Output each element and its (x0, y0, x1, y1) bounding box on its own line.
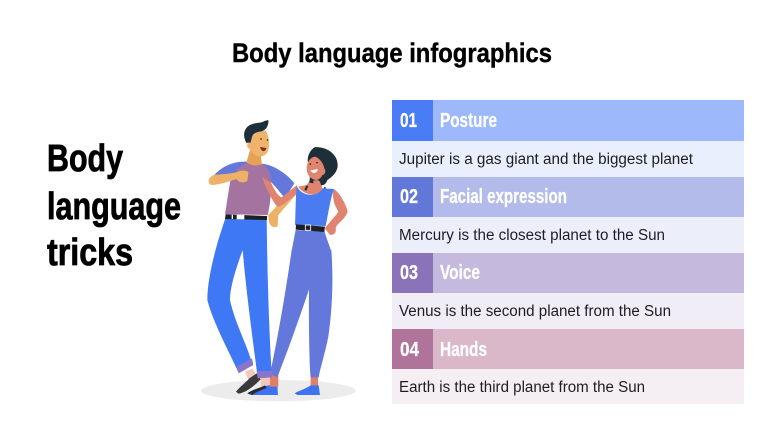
header band (392, 329, 744, 369)
woman: eyes (309, 162, 318, 165)
man: left sleeve (214, 162, 250, 176)
woman: right arm (325, 189, 348, 235)
man: front foot and shoe (247, 375, 278, 395)
row 2: facial expression: Facial expression (440, 186, 567, 208)
woman: arm on shoulder (262, 177, 297, 207)
woman: upper body (262, 147, 348, 251)
row 1: posture (392, 100, 744, 177)
number box (392, 329, 433, 369)
number box (392, 253, 433, 293)
woman: feet and shoes (270, 373, 320, 395)
description (392, 217, 744, 253)
row 1: posture: Jupiter is a gas giant and the biggest planet (399, 151, 694, 168)
header band (392, 253, 744, 293)
row 3: voice: 03 (400, 262, 418, 284)
woman: dress top (295, 186, 334, 226)
man: trousers (207, 219, 272, 378)
ground shadow (201, 380, 356, 401)
row 2: facial expression: Mercury is the closest planet to the Sun (399, 227, 665, 244)
header band (392, 100, 744, 141)
lower bodies (201, 219, 356, 401)
man: second arm (268, 186, 296, 227)
man: back foot and shoe (236, 368, 261, 394)
row 2: facial expression (392, 177, 744, 253)
row 3: voice: Voice (440, 262, 480, 284)
row 3: voice (392, 253, 744, 329)
heading: body language tricks (47, 138, 181, 274)
row 3: voice: Venus is the second planet from the Sun (399, 303, 671, 320)
man: forearm and fist (209, 171, 248, 185)
woman: straps (304, 185, 326, 193)
man: mouth (260, 147, 266, 151)
woman: dress lower (292, 230, 331, 251)
man: right sleeve (262, 164, 294, 198)
woman: face (307, 157, 325, 180)
illustration: man and woman (201, 120, 356, 401)
description (392, 369, 744, 404)
man: neck (247, 150, 262, 165)
man: shirt (225, 162, 271, 215)
woman: hair (308, 147, 338, 185)
number box (392, 100, 433, 141)
row 4: hands (392, 329, 744, 404)
woman: belt (296, 224, 325, 232)
woman: trousers (270, 250, 332, 377)
man: upper body (209, 120, 294, 220)
row 2: facial expression: 02 (400, 186, 418, 208)
man: head (247, 130, 269, 156)
heading: body language tricks: tricks (47, 232, 133, 274)
heading: body language tricks: language (47, 186, 181, 228)
row 4: hands: Hands (440, 339, 487, 361)
row 4: hands: Earth is the third planet from the Sun (399, 379, 645, 396)
number box (392, 177, 433, 217)
row 4: hands: 04 (400, 339, 420, 361)
man: hair (244, 120, 268, 143)
woman: neck (298, 173, 324, 195)
description (392, 141, 744, 177)
row 1: posture: Posture (440, 110, 497, 132)
heading: body language tricks: Body (47, 138, 123, 180)
title: Body language infographics (232, 38, 552, 68)
woman: mouth (310, 169, 318, 173)
header band (392, 177, 744, 217)
man: belt (225, 214, 267, 220)
description (392, 293, 744, 329)
man: eyes (260, 138, 268, 141)
row 1: posture: 01 (400, 110, 417, 132)
